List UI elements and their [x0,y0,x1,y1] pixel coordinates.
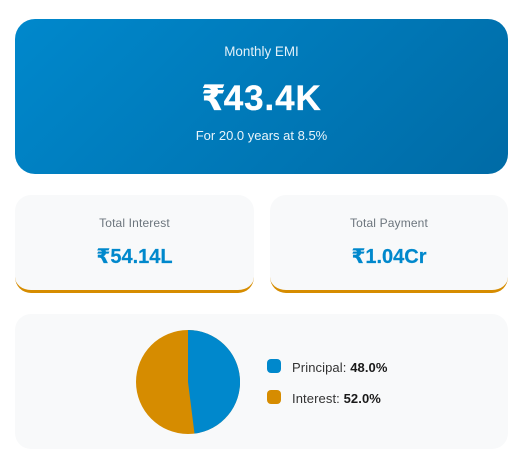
slice: principal 48% [188,330,240,434]
value: EMI amount: ₹43.4K [201,79,322,118]
legend swatch: principal [267,359,281,373]
heading: Monthly EMI: Monthly EMI [224,44,299,59]
legend text: interest: Interest: 52.0% [292,391,381,406]
panel: total payment card [270,195,508,293]
panel: monthly EMI hero [15,19,508,174]
legend text: principal: Principal: 48.0% [292,360,388,375]
legend swatch: interest [267,390,281,404]
label: Total Interest: Total Interest [99,216,170,230]
value: total payment amount: ₹1.04Cr [351,246,427,268]
label: Total Payment: Total Payment [350,216,428,230]
panel: total interest card [15,195,254,293]
value: total interest amount: ₹54.14L [96,246,173,268]
panel: breakdown chart [15,314,508,449]
text: loan term and rate: For 20.0 years at 8.5% [196,128,327,143]
slice: interest 52% [136,330,240,434]
pie chart: principal vs interest [136,330,240,434]
